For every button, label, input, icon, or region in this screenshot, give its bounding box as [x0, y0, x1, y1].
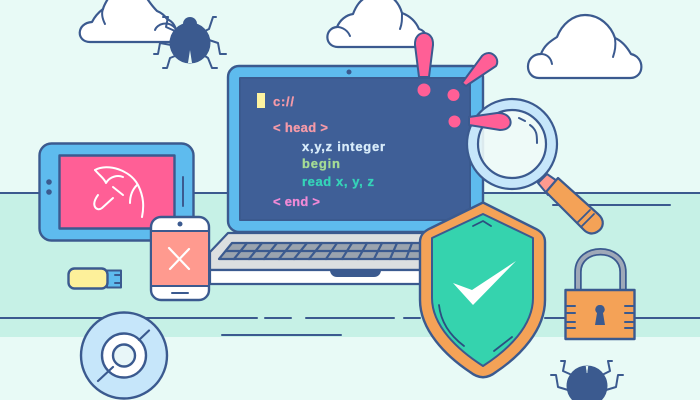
- magnifying glass: [467, 99, 603, 233]
- icon: cross: [169, 248, 189, 269]
- code text: read x, y, z: [302, 174, 374, 189]
- laptop lid: [228, 66, 483, 232]
- cloud: top right: [528, 15, 641, 78]
- code text: < head >: [273, 120, 328, 135]
- laptop screen: [240, 78, 470, 220]
- USB stick: [68, 268, 121, 288]
- code cursor: [257, 93, 265, 108]
- shield: [420, 202, 545, 377]
- icon: keyhole: [595, 305, 605, 325]
- exclamation dots: [418, 84, 460, 128]
- laptop: [210, 66, 483, 284]
- phone: [151, 217, 209, 300]
- icon: check mark: [453, 261, 516, 305]
- code text: < end >: [273, 194, 320, 209]
- magnifier handle: [546, 178, 603, 233]
- laptop base: [210, 233, 440, 284]
- cloud: top centre: [327, 0, 426, 47]
- magnifier ferrule: [538, 174, 560, 195]
- code text: c://: [273, 94, 294, 109]
- tablet: [40, 144, 194, 240]
- cloud: top left: [80, 0, 176, 42]
- icon: umbrella: [94, 167, 143, 217]
- padlock: [566, 252, 634, 339]
- bug: top: [154, 17, 226, 68]
- code text: begin: [302, 156, 340, 171]
- code text: x,y,z integer: [302, 139, 385, 154]
- bug: bottom: [551, 361, 623, 400]
- exclamation marks: [415, 33, 511, 130]
- disc: [81, 312, 167, 398]
- keyboard: [219, 243, 430, 259]
- code text: [273, 94, 385, 209]
